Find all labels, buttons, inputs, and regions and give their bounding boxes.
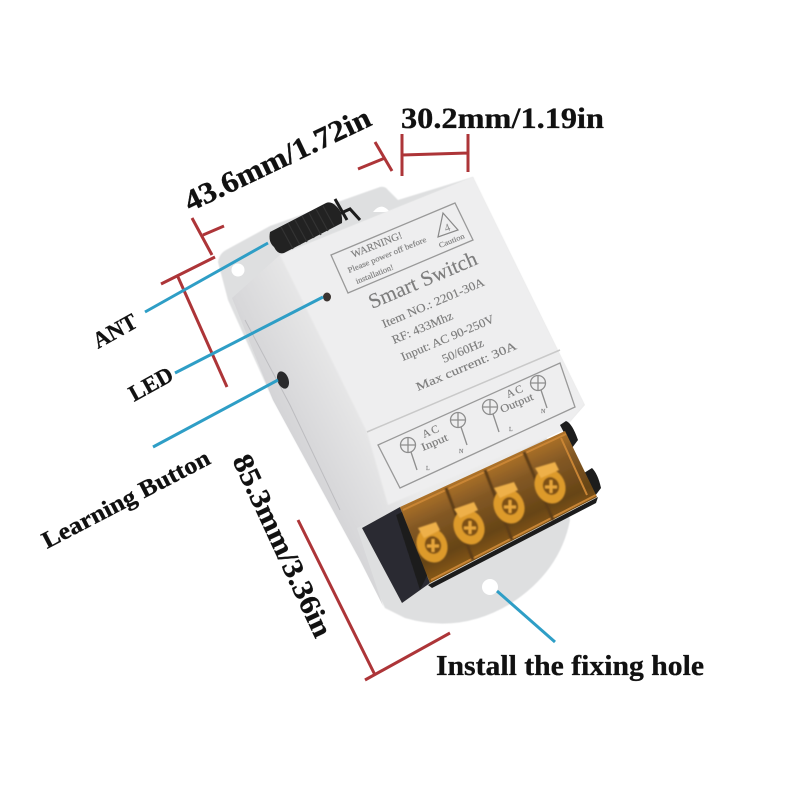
label: LED: LED xyxy=(124,362,178,406)
product specifications: RF: 433Mhz xyxy=(390,308,455,347)
label: ANT: ANT xyxy=(88,309,142,353)
mounting plate xyxy=(218,177,570,624)
label: fixing hole: Install the fixing hole xyxy=(436,651,704,682)
terminal block xyxy=(362,421,601,603)
warning label: installation! xyxy=(354,263,395,286)
fixing holes xyxy=(232,207,498,595)
dimension lines xyxy=(161,134,468,680)
black base xyxy=(362,507,430,603)
terminal legend: N xyxy=(459,449,464,455)
product specifications: Item NO.: 2201-30A xyxy=(380,275,487,331)
warning label: Please power off before xyxy=(346,235,428,275)
device: smart switch xyxy=(218,177,601,624)
callout lines xyxy=(145,243,555,642)
warning label: WARNING! xyxy=(350,230,404,261)
terminal legend: A C xyxy=(420,423,441,441)
label: Learning Button: Learning Button xyxy=(38,445,215,554)
learning button xyxy=(275,370,291,390)
product specifications xyxy=(365,246,519,394)
warning label: 4 xyxy=(443,221,453,235)
warning label xyxy=(331,203,473,293)
product specifications: 50/60Hz xyxy=(440,336,486,366)
product specifications: Input: AC 90-250V xyxy=(399,312,497,364)
terminal legend: A C xyxy=(504,383,525,401)
antenna coil xyxy=(270,199,360,253)
terminal legend: Output xyxy=(498,391,535,416)
screws xyxy=(411,462,571,568)
product specifications: Smart Switch xyxy=(365,246,481,314)
warning label: Caution xyxy=(437,231,466,250)
terminal legend: Input xyxy=(419,432,450,454)
housing body xyxy=(232,177,585,606)
dimension: length: 85.3mm/3.36in xyxy=(226,449,338,642)
dimension: depth: 43.6mm/1.72in xyxy=(179,101,377,218)
amber cover xyxy=(400,431,597,583)
dimension: width: 30.2mm/1.19in xyxy=(401,102,604,135)
terminal legend: L xyxy=(426,466,430,472)
terminal legend: N xyxy=(541,409,546,415)
LED dot xyxy=(323,292,331,302)
terminal legend: L xyxy=(509,427,513,433)
product specifications: Max current: 30A xyxy=(414,339,519,394)
terminal legend xyxy=(378,363,575,488)
